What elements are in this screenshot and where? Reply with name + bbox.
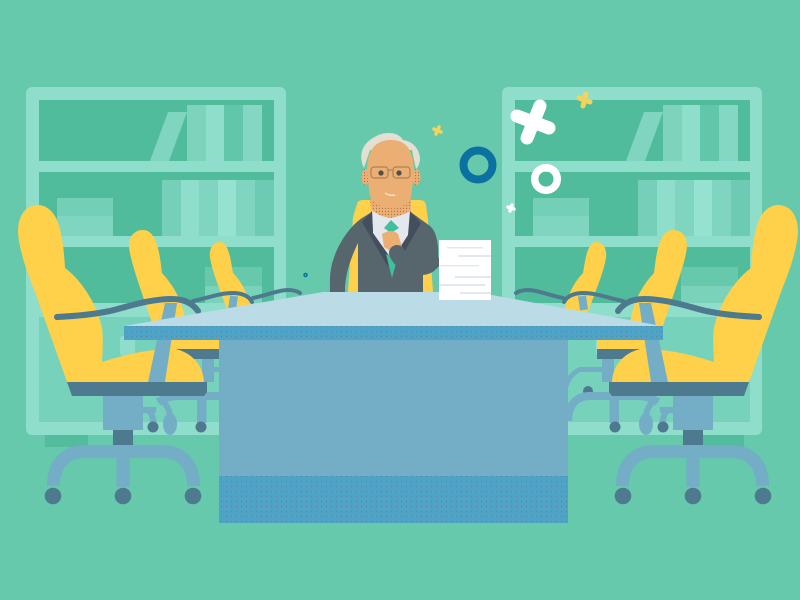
tie [384,220,399,233]
mouth [385,193,395,195]
lapel left [362,211,390,267]
icon: yellow cross large [579,94,590,106]
shirt [372,211,411,260]
left chairs [18,205,300,504]
man at head of the table [329,133,438,292]
face [367,140,414,214]
neck [371,200,411,216]
hand [382,231,402,252]
shelf shadow right [703,435,744,447]
ears [362,169,370,185]
icon: yellow cross small [434,127,441,134]
hair [361,133,420,169]
icon: white ring [535,168,557,190]
icon: tiny blue ring [304,274,307,276]
shelf shadow left [45,435,88,447]
table front edge [124,326,663,340]
beard stubble [370,199,411,218]
icon: white cross small [508,205,514,211]
suit [330,212,438,292]
table top [124,292,662,326]
right chairs [516,205,798,504]
table [124,292,663,523]
yellow gap [348,243,358,292]
head chair [348,200,433,292]
icon: blue ring [464,150,492,180]
stack of papers [439,240,491,300]
eyes [378,170,384,176]
icon: large white cross [517,106,549,138]
glasses [371,167,410,178]
right bookshelf [502,87,762,435]
left bookshelf [26,87,286,435]
forearm [397,253,432,264]
table lower band [219,476,568,523]
lapel right [397,211,421,256]
table body [219,340,568,476]
sliver behind arm [329,262,334,292]
